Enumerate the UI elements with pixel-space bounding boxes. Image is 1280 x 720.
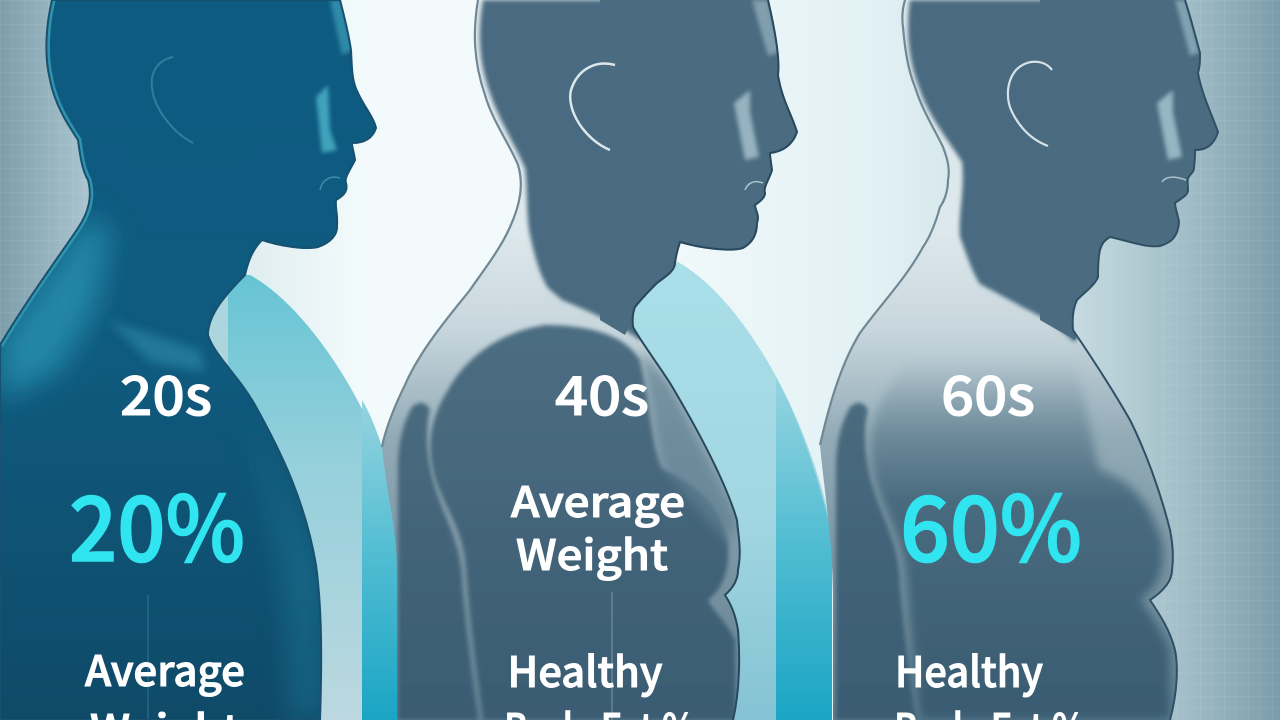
label Average Weight: Average bbox=[511, 469, 685, 530]
percentage 20%: 20% bbox=[69, 457, 245, 587]
label Average Weight: Average bbox=[85, 638, 245, 699]
age label 60s: 60s bbox=[941, 352, 1035, 431]
label Healthy Body Fat %: Healthy bbox=[508, 639, 663, 700]
teal arc behind 40s figure bbox=[630, 262, 832, 720]
figure: 40s silhouette bbox=[370, 0, 810, 720]
ear outline bbox=[1008, 62, 1052, 146]
ear outline bbox=[570, 64, 615, 150]
label Healthy Body Fat %: Healthy bbox=[895, 639, 1043, 700]
teal arc behind 20s figure bbox=[208, 275, 398, 720]
figure: 20s silhouette bbox=[0, 0, 400, 720]
figure: 60s silhouette bbox=[810, 0, 1230, 720]
label Healthy Body Fat % bbox=[894, 639, 1086, 720]
ear outline bbox=[152, 57, 193, 143]
label Average Weight: Weight bbox=[516, 522, 668, 583]
label Average Weight bbox=[511, 469, 685, 583]
percentage 60%: 60% bbox=[900, 457, 1082, 587]
column 20s text bbox=[69, 352, 245, 720]
label Healthy Body Fat % bbox=[504, 639, 696, 720]
column 40s text bbox=[504, 352, 696, 720]
age label 20s: 20s bbox=[120, 352, 212, 431]
column 60s text bbox=[894, 352, 1086, 720]
age label 40s: 40s bbox=[555, 352, 649, 431]
